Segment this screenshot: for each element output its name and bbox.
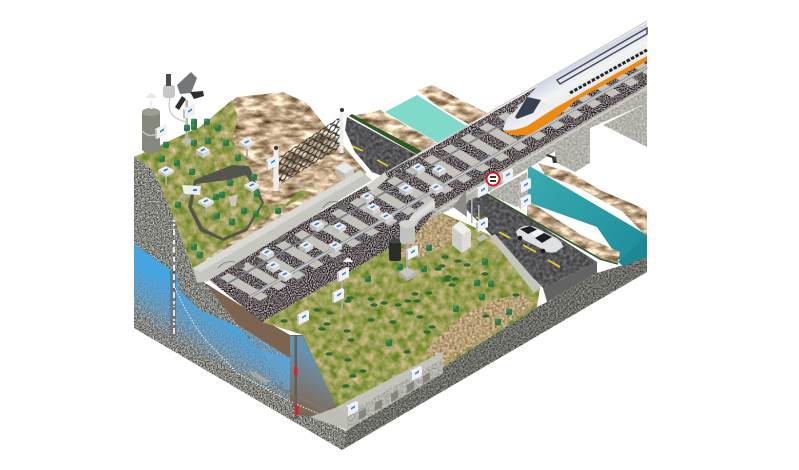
- high speed train: [503, 23, 647, 135]
- hill sensors: [155, 104, 278, 217]
- embankment barrier wall: [193, 170, 372, 283]
- track sensors: [260, 163, 446, 282]
- curved wing wall lower: [407, 199, 436, 226]
- observation well with red sensors: [294, 320, 304, 419]
- excavated pit: [188, 160, 264, 241]
- field ground: [262, 210, 540, 407]
- radiation shield stack: [399, 220, 418, 281]
- cut slope brown soil: [205, 283, 337, 417]
- bridge sensors: [476, 168, 531, 209]
- lower river: [527, 165, 647, 266]
- electrical cabinet: [452, 221, 471, 253]
- silver car: [516, 226, 563, 253]
- wall sensors: [346, 366, 422, 416]
- groundwater left: [134, 244, 290, 400]
- rails: [225, 40, 647, 297]
- lower river near bank: [482, 191, 620, 264]
- abutment: [490, 172, 527, 207]
- road embankment retaining strip: [490, 234, 541, 293]
- rock fall net: [274, 108, 344, 191]
- weather station mast: [163, 72, 204, 144]
- rain gauge drum: [389, 238, 401, 261]
- bridge guard railing: [387, 21, 647, 178]
- bridge pier far: [603, 103, 647, 147]
- gray instrument box on barrier: [335, 162, 354, 179]
- hill rock: [134, 92, 367, 270]
- weather station tank: [142, 93, 160, 154]
- speed limit sign: [486, 172, 500, 186]
- hill bushes: [159, 119, 281, 258]
- upper river: [385, 95, 468, 143]
- hill grass: [134, 100, 312, 268]
- road embankment side: [543, 262, 597, 302]
- groundwater monitoring well left: [170, 220, 176, 336]
- drainage pipe with capsule: [249, 370, 347, 421]
- abutment dark triangle: [453, 190, 467, 217]
- upper river far bank: [417, 85, 487, 125]
- lower river far bank: [538, 163, 647, 237]
- upper river near bank: [348, 110, 437, 155]
- bridge deck side beam: [428, 80, 647, 220]
- field flat shrubs: [280, 255, 520, 388]
- lower road: [465, 190, 597, 288]
- barrier edge sensors: [218, 202, 348, 269]
- roadside logger: [471, 195, 488, 242]
- railway sleepers: [218, 30, 647, 302]
- upper road: [345, 117, 417, 177]
- curved wing wall upper: [366, 172, 388, 192]
- bridge pier near: [555, 125, 590, 172]
- left side soil cross-section: [134, 157, 347, 450]
- field logger cluster: [297, 258, 353, 325]
- retaining wall: [310, 352, 443, 430]
- dotted sensing cable: [175, 288, 342, 424]
- right side ground face: [342, 240, 647, 450]
- ballast bed: [207, 23, 647, 322]
- bracket under bridge: [546, 154, 557, 163]
- field cube shrubs: [365, 245, 512, 346]
- groundwater right: [238, 325, 336, 417]
